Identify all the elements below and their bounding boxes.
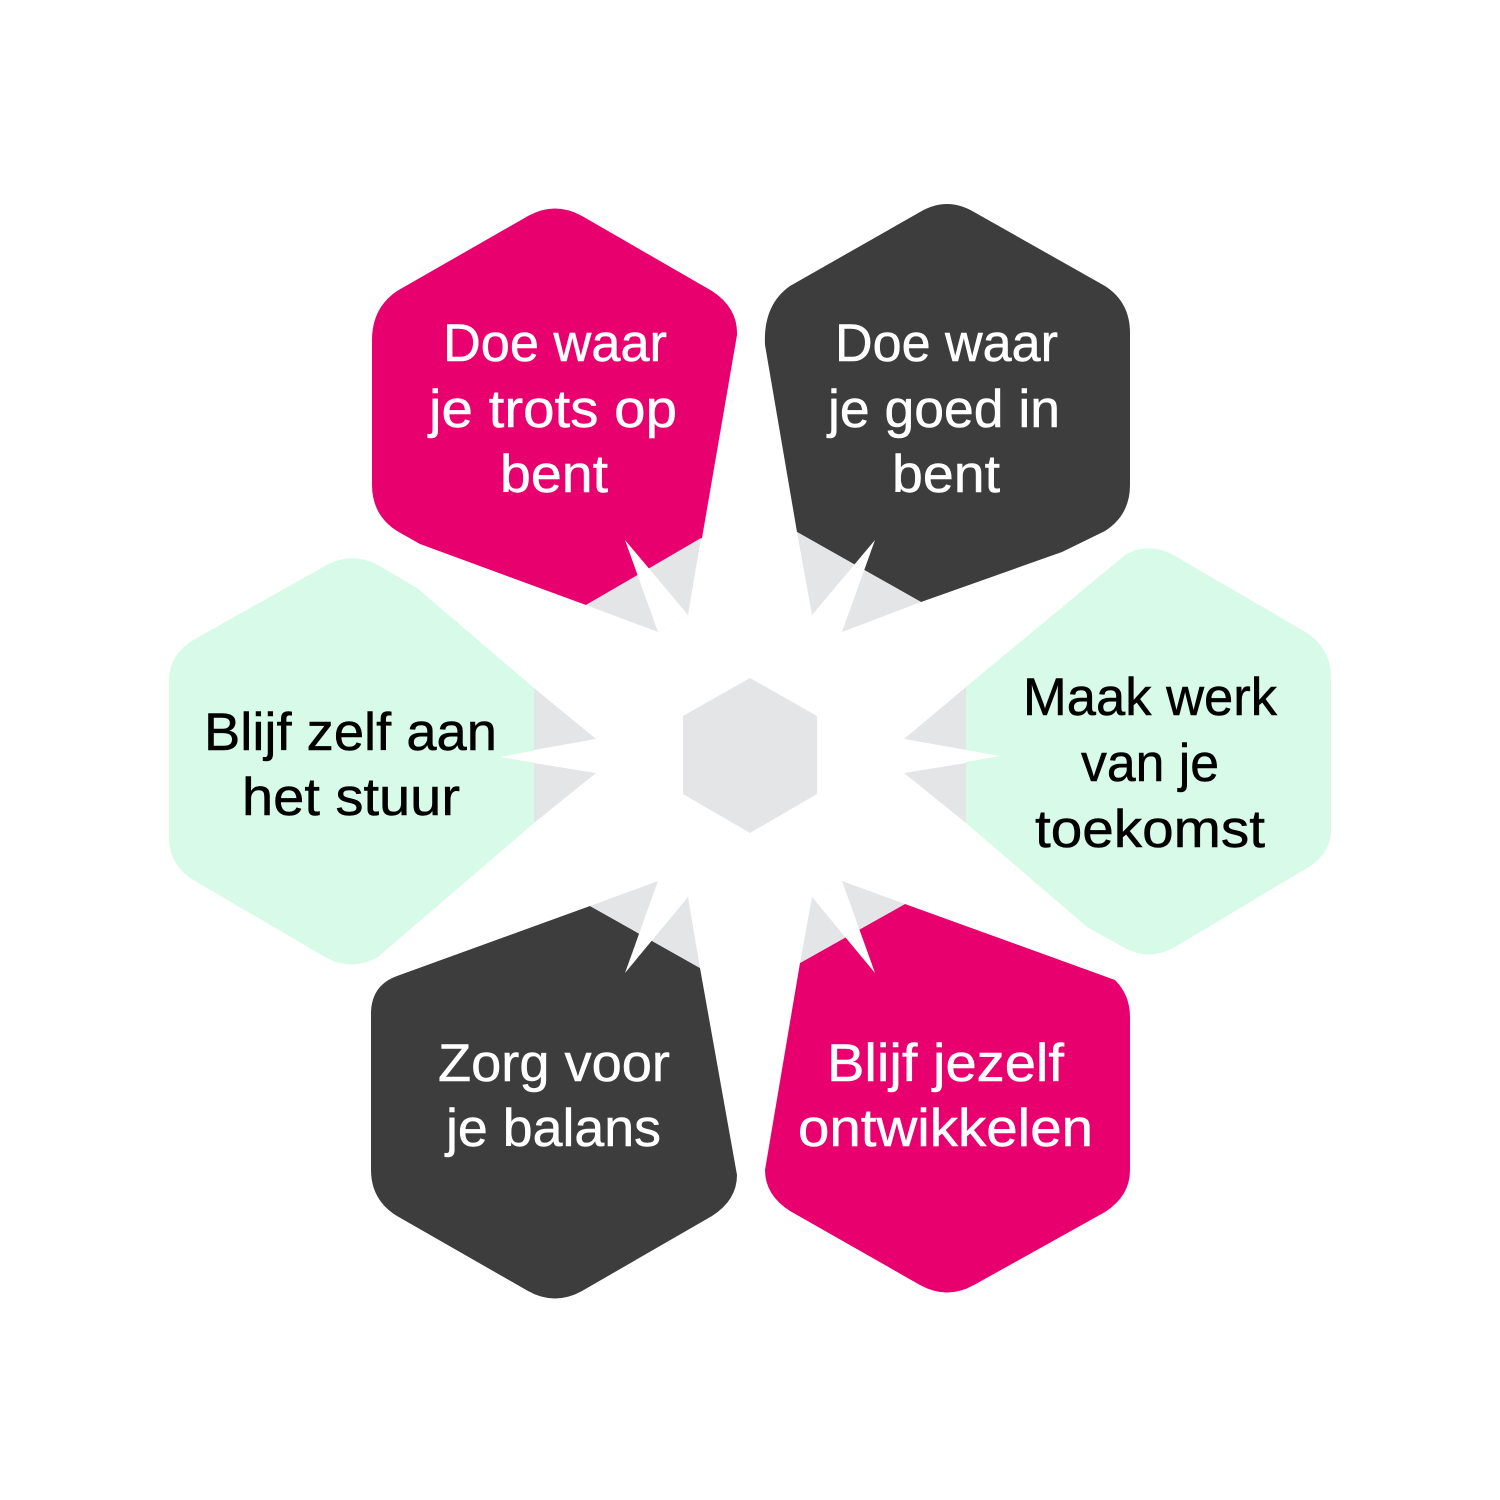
panel: doe waar je goed in bent (765, 204, 1130, 632)
panel: doe waar je goed in bent: je goed in (826, 380, 1060, 439)
panel: doe waar je goed in bent: Doe waar (835, 314, 1058, 373)
panel: blijf jezelf ontwikkelen: ontwikkelen (798, 1099, 1093, 1158)
panel: maak werk van je toekomst: Maak werk (1023, 668, 1277, 727)
panel: blijf zelf aan het stuur: Blijf zelf aan (204, 703, 497, 762)
centre hexagon (683, 678, 817, 833)
panel: blijf jezelf ontwikkelen: Blijf jezelf (827, 1034, 1064, 1093)
panel: maak werk van je toekomst (904, 548, 1331, 954)
panel: blijf jezelf ontwikkelen (765, 881, 1130, 1292)
panel: doe waar je goed in bent: bent (892, 445, 1000, 504)
panel: doe waar je trots op bent: je trots op (427, 380, 677, 439)
panel: doe waar je trots op bent: Doe waar (443, 314, 667, 373)
panel: zorg voor je balans: Zorg voor (438, 1034, 670, 1093)
panel: doe waar je trots op bent: bent (500, 445, 608, 504)
panel: zorg voor je balans (371, 881, 737, 1298)
panel: blijf zelf aan het stuur: het stuur (242, 768, 460, 827)
panel: doe waar je trots op bent (372, 208, 737, 632)
panel: zorg voor je balans: je balans (444, 1099, 661, 1158)
panel: maak werk van je toekomst: van je (1081, 734, 1219, 793)
panel: blijf zelf aan het stuur (169, 558, 596, 964)
panel: maak werk van je toekomst: toekomst (1035, 800, 1265, 859)
